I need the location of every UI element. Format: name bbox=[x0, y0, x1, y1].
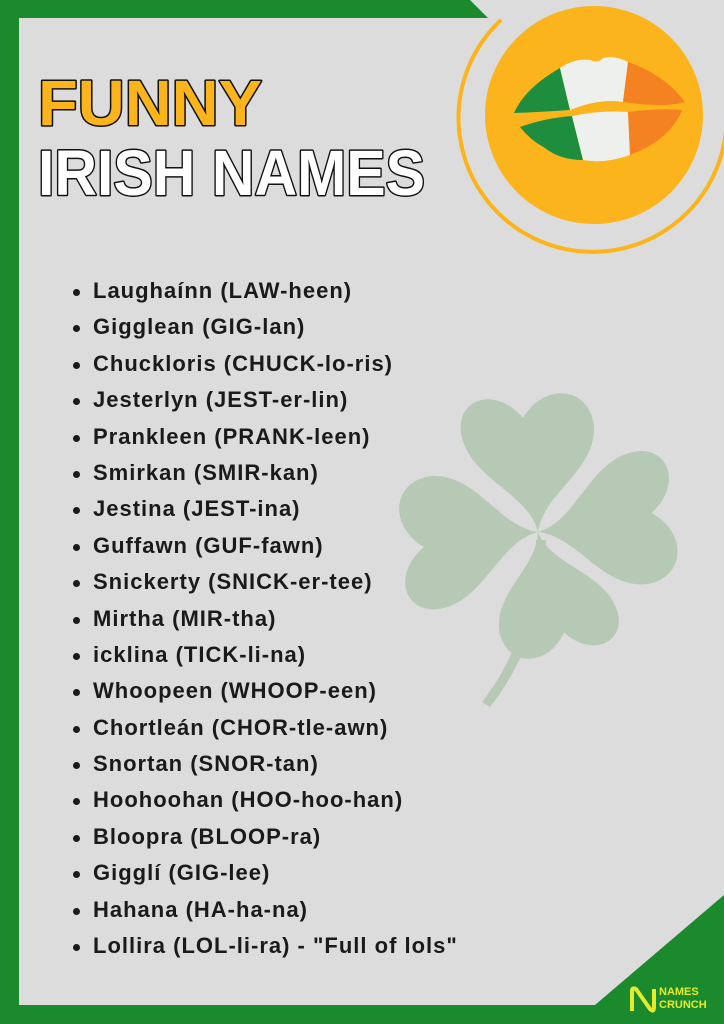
list: names: Whoopeen (WHOOP-een) bbox=[93, 678, 377, 703]
list: names: Chuckloris (CHUCK-lo-ris) bbox=[93, 351, 393, 376]
list: names: Lollira (LOL-li-ra) - "Full of lols" bbox=[93, 933, 458, 958]
list: names: Hahana (HA-ha-na) bbox=[93, 897, 308, 922]
title bbox=[38, 67, 425, 209]
list: names: Chortleán (CHOR-tle-awn) bbox=[93, 715, 388, 740]
list: names: Smirkan (SMIR-kan) bbox=[93, 460, 319, 485]
logo: names crunch bbox=[630, 986, 707, 1013]
list: names: Jesterlyn (JEST-er-lin) bbox=[93, 387, 348, 412]
logo: names crunch: NAMES bbox=[659, 986, 699, 998]
list: names: Guffawn (GUF-fawn) bbox=[93, 533, 324, 558]
title: FUNNY bbox=[38, 67, 262, 139]
list: names bbox=[73, 278, 458, 958]
icon: ring and circle with lips bbox=[456, 6, 724, 254]
logo: names crunch: CRUNCH bbox=[659, 999, 707, 1011]
list: names: Snickerty (SNICK-er-tee) bbox=[93, 569, 373, 594]
icon: lips bbox=[514, 57, 685, 161]
list: names: Laughaínn (LAW-heen) bbox=[93, 278, 352, 303]
list: names: icklina (TICK-li-na) bbox=[93, 642, 306, 667]
list: names: Hoohoohan (HOO-hoo-han) bbox=[93, 787, 403, 812]
list: names: Bloopra (BLOOP-ra) bbox=[93, 824, 321, 849]
list: names: Mirtha (MIR-tha) bbox=[93, 606, 276, 631]
list: names: Jestina (JEST-ina) bbox=[93, 496, 301, 521]
list: names: Prankleen (PRANK-leen) bbox=[93, 424, 371, 449]
list: names: Gigglí (GIG-lee) bbox=[93, 860, 270, 885]
title: IRISH NAMES bbox=[38, 137, 425, 209]
list: names: Gigglean (GIG-lan) bbox=[93, 314, 305, 339]
list: names: Snortan (SNOR-tan) bbox=[93, 751, 319, 776]
